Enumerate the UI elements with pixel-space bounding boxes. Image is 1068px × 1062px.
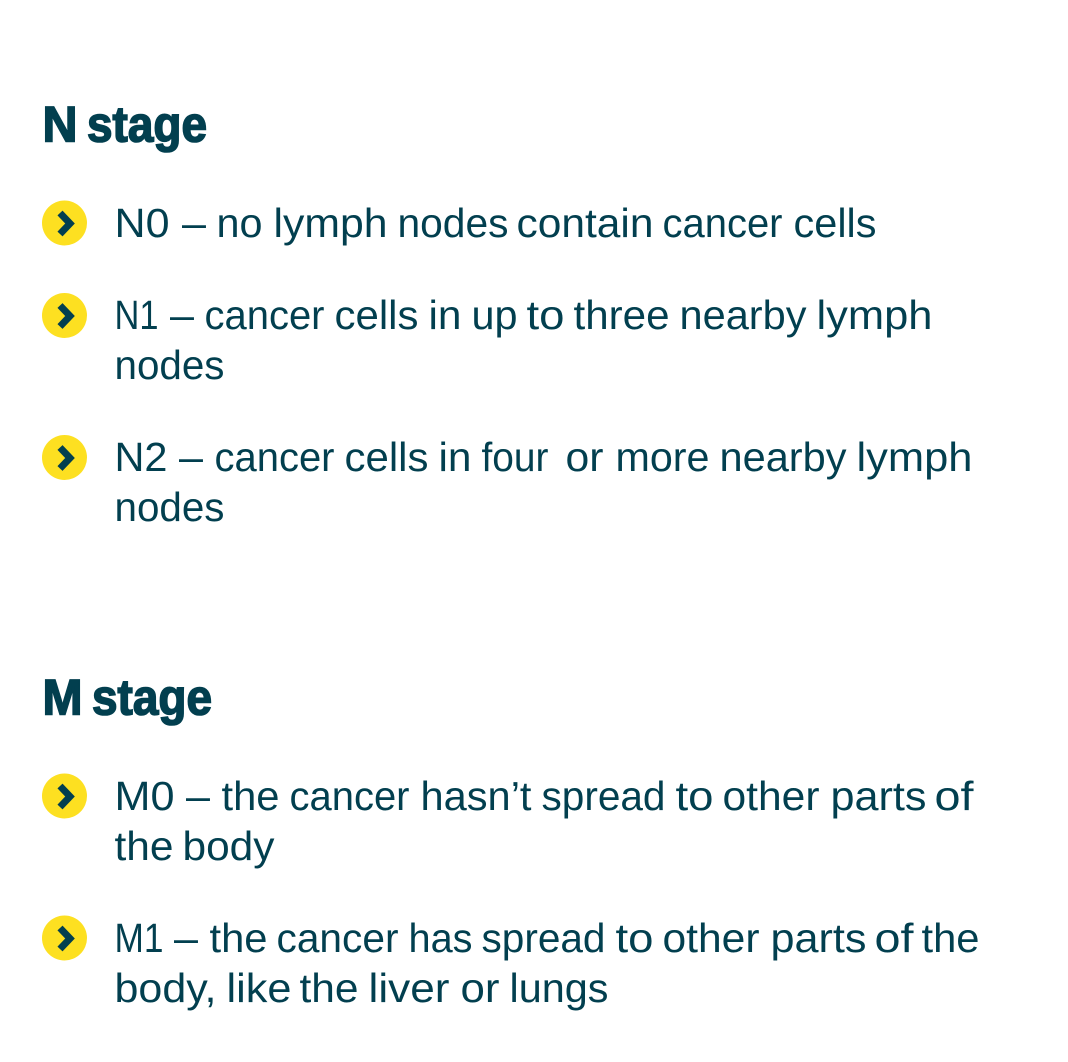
text: N1 description: nearby: [680, 292, 807, 338]
text: M1 description: M1: [114, 915, 164, 961]
text: N0 description: N0: [114, 200, 170, 246]
text: N0 description: no: [216, 200, 262, 246]
text: N2 description: nodes: [114, 484, 224, 530]
text: M1 description: has: [408, 915, 472, 961]
icon: yellow chevron bullet: [42, 435, 87, 480]
text: N0 description: cells: [794, 200, 876, 246]
text: M1 description: or: [460, 965, 500, 1011]
text: M0 description: parts: [830, 773, 926, 819]
text: N1 description: in: [428, 292, 462, 338]
text: N2 description: more: [616, 434, 710, 480]
text: N2 description: cancer: [214, 434, 334, 480]
text: N0 description: –: [182, 200, 206, 246]
text: N2 description: –: [179, 434, 203, 480]
text: M0 description: to: [676, 773, 714, 819]
text: N0 description: [114, 200, 876, 246]
heading: M stage: stage: [92, 670, 212, 726]
text: N0 description: lymph: [274, 200, 388, 246]
text: M0 description: of: [934, 773, 974, 819]
text: N1 description: –: [170, 292, 194, 338]
icon: yellow chevron bullet: [42, 200, 87, 246]
text: N2 description: or: [566, 434, 604, 480]
text: N2 description: four: [482, 434, 548, 480]
text: N2 description: lymph: [856, 434, 972, 480]
text: N2 description: [114, 434, 972, 530]
heading: M stage: [42, 670, 212, 726]
text: N0 description: nodes: [398, 200, 508, 246]
text: M1 description: other: [662, 915, 760, 961]
text: M1 description: the: [210, 915, 268, 961]
heading: N stage: [42, 96, 207, 152]
icon: yellow chevron bullet: [42, 293, 87, 338]
text: N1 description: to: [526, 292, 564, 338]
text: M0 description: hasn’t: [420, 773, 532, 819]
text: M0 description: spread: [542, 773, 666, 819]
text: N1 description: N1: [114, 292, 158, 338]
text: N1 description: lymph: [816, 292, 932, 338]
text: M1 description: liver: [368, 965, 450, 1011]
list item: M0: [42, 773, 974, 869]
icon: yellow chevron bullet: [42, 916, 87, 960]
text: N1 description: [114, 292, 932, 388]
text: M0 description: the: [222, 773, 280, 819]
text: N1 description: three: [574, 292, 670, 338]
text: N1 description: up: [472, 292, 518, 338]
text: M1 description: to: [616, 915, 654, 961]
heading: N stage: N: [42, 96, 78, 152]
text: M0 description: –: [186, 773, 210, 819]
text: M0 description: the: [114, 823, 174, 869]
text: M0 description: body: [182, 823, 275, 869]
text: M1 description: of: [874, 915, 914, 961]
text: M1 description: parts: [770, 915, 866, 961]
text: M1 description: –: [174, 915, 198, 961]
panel: N stage: [42, 96, 972, 530]
list item: N1: [42, 292, 932, 388]
text: N0 description: cancer: [662, 200, 782, 246]
heading: N stage: stage: [87, 96, 207, 152]
list item: N0: [42, 200, 876, 246]
text: M0 description: [114, 773, 974, 869]
heading: M stage: M: [42, 670, 82, 726]
text: M0 description: other: [722, 773, 820, 819]
text: M0 description: cancer: [290, 773, 410, 819]
text: M1 description: lungs: [510, 965, 608, 1011]
text: M1 description: like: [226, 965, 292, 1011]
text: N2 description: N2: [114, 434, 168, 480]
text: N1 description: cancer: [204, 292, 324, 338]
text: M1 description: body,: [114, 965, 216, 1011]
text: N1 description: cells: [334, 292, 418, 338]
list item: N2: [42, 434, 972, 530]
text: M1 description: the: [300, 965, 358, 1011]
text: M1 description: [114, 915, 980, 1011]
text: N2 description: nearby: [720, 434, 847, 480]
text: N0 description: contain: [516, 200, 654, 246]
text: M0 description: M0: [114, 773, 174, 819]
text: M1 description: spread: [482, 915, 606, 961]
text: N2 description: cells: [344, 434, 428, 480]
text: M1 description: cancer: [276, 915, 398, 961]
text: M1 description: the: [922, 915, 980, 961]
icon: yellow chevron bullet: [42, 774, 87, 818]
list item: M1: [42, 915, 980, 1011]
text: N2 description: in: [438, 434, 472, 480]
text: N1 description: nodes: [114, 342, 224, 388]
panel: M stage: [42, 670, 980, 1011]
